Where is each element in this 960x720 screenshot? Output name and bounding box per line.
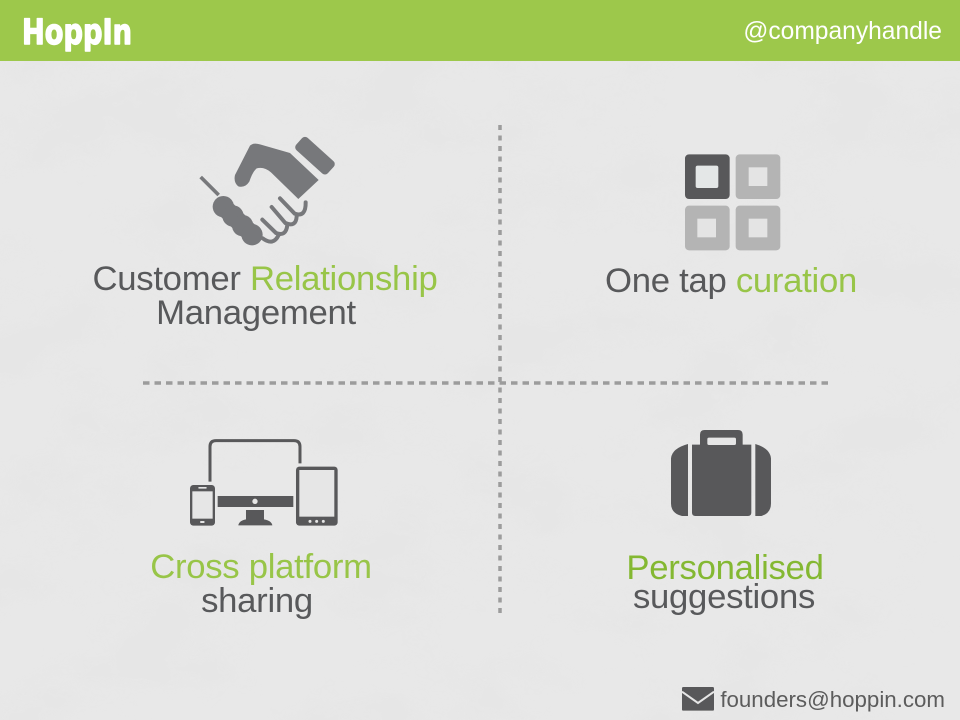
panel: cross platform sharing (150, 441, 372, 620)
panel: customer relationship management (92, 135, 438, 332)
label: customer relationship: Customer Relationship (92, 260, 438, 298)
label: management: Management (156, 294, 356, 332)
label: one tap curation: One tap curation (605, 262, 857, 300)
icon: briefcase (671, 430, 771, 516)
label: sharing: sharing (201, 582, 313, 620)
logo: HoppIn: HoppIn (22, 13, 132, 53)
icon: tile grid (685, 154, 780, 250)
icon: devices (190, 441, 338, 526)
label: personalised: Personalised (626, 549, 824, 587)
label: suggestions: suggestions (633, 578, 815, 616)
label: cross platform: Cross platform (150, 548, 372, 586)
horizontal dashed divider (143, 381, 828, 385)
icon: handshake (201, 135, 336, 245)
icon: envelope (682, 687, 714, 711)
company handle: @companyhandle (743, 18, 942, 45)
email address: founders@hoppin.com (720, 687, 945, 712)
vertical dashed divider (498, 125, 502, 613)
panel: personalised suggestions (626, 430, 824, 616)
header bar (0, 0, 960, 61)
panel: one tap curation (605, 154, 857, 300)
footer contact (682, 687, 945, 712)
